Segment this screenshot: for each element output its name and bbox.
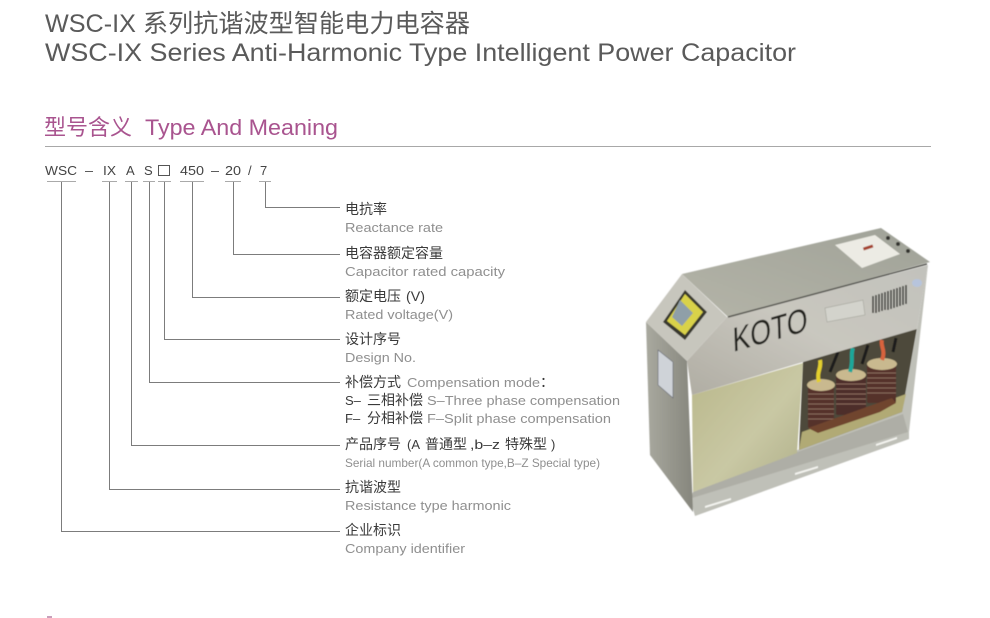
model code: A	[126, 163, 135, 178]
model code: /	[248, 163, 252, 178]
label: compensation mode: 补偿方式	[345, 374, 401, 390]
model code: –	[211, 163, 220, 178]
model code: 7	[260, 163, 267, 178]
product photo: KOTO capacitor cabinet	[646, 228, 930, 516]
label: rated voltage: Rated voltage(V)	[345, 307, 453, 322]
label: capacitor rated capacity	[345, 245, 506, 279]
label: serial number: 特殊型	[505, 436, 547, 452]
badge	[912, 279, 922, 287]
cabinet upper front band	[687, 265, 928, 395]
label: capacitor rated capacity: 电容器额定容量	[345, 245, 443, 261]
title: Chinese: WSC-IX 系列抗谐波型智能电力电容器	[45, 10, 470, 38]
KOTO logo: KOTO	[732, 301, 808, 360]
title	[45, 10, 796, 67]
cabinet window	[799, 328, 917, 450]
title: English: WSC-IX Series Anti-Harmonic Type Intelligent Power Capacitor	[45, 39, 796, 67]
label: capacitor rated capacity: Capacitor rated capacity	[345, 264, 506, 279]
label: serial number: )	[551, 437, 555, 452]
base slots	[705, 437, 897, 508]
label: compensation mode: F–Split phase compensation	[427, 411, 611, 426]
label: serial number: 产品序号	[345, 436, 401, 452]
label: compensation mode: 分相补偿	[367, 410, 423, 426]
label: company identifier: 企业标识	[345, 522, 401, 538]
label: compensation mode: F–	[345, 411, 361, 426]
label: rated voltage	[345, 288, 453, 322]
label: reactance rate: 电抗率	[345, 201, 387, 217]
model code: –	[85, 163, 94, 178]
label: rated voltage: 额定电压	[345, 288, 401, 304]
label window	[825, 300, 865, 322]
ventilation grille	[873, 285, 906, 313]
label: serial number: 普通型	[425, 436, 467, 452]
model code: 20	[225, 163, 241, 178]
label: resistance type harmonic	[345, 479, 512, 513]
display panel	[663, 290, 707, 340]
label: compensation mode: S–	[345, 393, 362, 408]
label: compensation mode: Compensation mode	[407, 375, 540, 390]
cabinet slanted facet	[646, 274, 727, 361]
section heading: Type And Meaning: 型号含义	[44, 115, 132, 140]
model code: IX	[103, 163, 116, 178]
label: serial number	[345, 436, 600, 470]
label: reactance rate	[345, 201, 443, 235]
label: serial number: (A	[407, 437, 420, 452]
cabinet lower left plate	[692, 363, 803, 492]
leader lines	[47, 182, 340, 532]
model code	[45, 163, 267, 178]
model code: S	[144, 163, 153, 178]
label: compensation mode	[345, 374, 620, 426]
label: resistance type harmonic: Resistance type harmonic	[345, 498, 512, 513]
terminal plate	[835, 235, 900, 268]
side data label	[658, 350, 673, 398]
section heading: Type And Meaning: Type And Meaning	[145, 115, 338, 140]
label: design number: Design No.	[345, 350, 416, 365]
label: reactance rate: Reactance rate	[345, 220, 443, 235]
model code: WSC	[45, 163, 77, 178]
label: serial number: Serial number(A common type,B–Z Special type)	[345, 456, 600, 470]
label: resistance type harmonic: 抗谐波型	[345, 479, 401, 495]
label: compensation mode: ：	[540, 374, 554, 390]
cabinet base flange	[690, 265, 928, 516]
label: design number: 设计序号	[345, 331, 401, 347]
reactor coils	[807, 338, 897, 433]
label: design number	[345, 331, 416, 365]
cabinet top	[682, 228, 930, 317]
section heading: Type And Meaning	[44, 115, 931, 146]
label: company identifier	[345, 522, 466, 556]
model code: 450	[180, 163, 204, 178]
bottom edge mark	[47, 616, 52, 618]
label: company identifier: Company identifier	[345, 541, 466, 556]
label: rated voltage: (V)	[406, 288, 425, 304]
cabinet left side	[646, 322, 693, 512]
label: serial number: ,b–z	[470, 437, 500, 452]
label: compensation mode: S–Three phase compensation	[427, 393, 620, 408]
terminal holes	[886, 236, 910, 253]
label: compensation mode: 三相补偿	[367, 392, 423, 408]
